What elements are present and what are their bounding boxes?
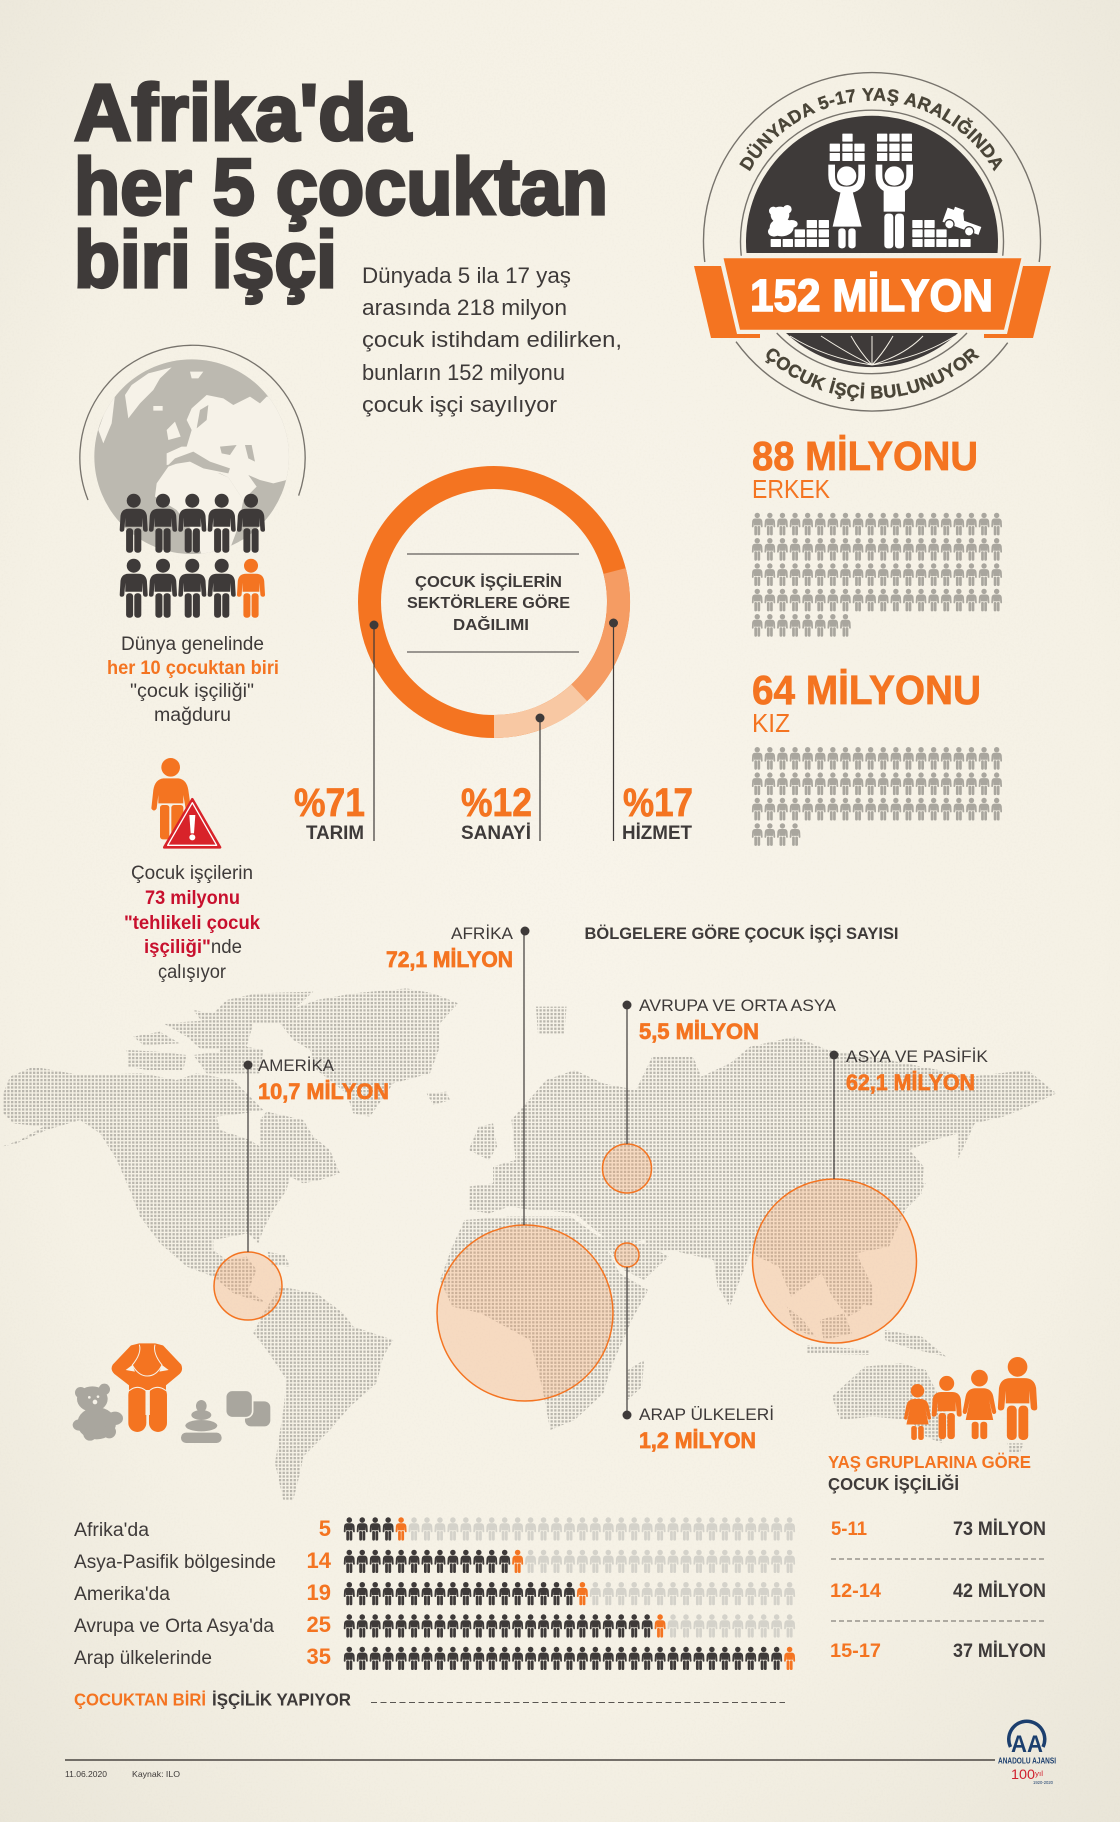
caption: one in ten: mağduru <box>154 705 231 726</box>
leader lines <box>370 618 618 841</box>
footer <box>65 1760 995 1779</box>
row: Afrika: Afrika'da <box>74 1520 149 1541</box>
badge: 152 milyon <box>694 72 1051 412</box>
caption: hazardous child labour: 73 milyonu <box>145 888 240 909</box>
region bubble: Arap ülkeleri: ARAP ÜLKELERİ <box>639 1405 774 1424</box>
table: age groups <box>830 1517 1046 1662</box>
footer: 11.06.2020 <box>65 1769 107 1779</box>
caption: one in ten: her 10 çocuktan biri <box>107 658 279 679</box>
table: age groups: 15-17 <box>830 1640 881 1662</box>
table: age groups: 37 MİLYON <box>953 1639 1046 1662</box>
children carrying blocks <box>768 134 985 248</box>
region bubble: Amerika: 10,7 MİLYON <box>258 1079 389 1104</box>
caption: hazardous child labour: işçiliği"nde <box>144 937 242 958</box>
pictogram: 88 <box>752 513 1002 637</box>
intro paragraph <box>362 263 622 417</box>
pictogram: 64 <box>752 747 1002 846</box>
row: Afrika: 5 <box>319 1516 331 1541</box>
row: Amerika <box>74 1580 795 1605</box>
row: Avrupa ve Orta Asya: 25 <box>307 1612 331 1637</box>
region bubble: Afrika <box>386 924 613 1401</box>
intro paragraph: arasında 218 milyon <box>362 295 567 320</box>
caption: hazardous child labour <box>124 863 260 983</box>
label: sanayi <box>461 781 532 844</box>
badge dark disc <box>746 116 998 367</box>
region bubble: Afrika: 72,1 MİLYON <box>386 947 513 972</box>
logo: Anadolu Ajansı: yıl <box>1035 1771 1044 1778</box>
logo: Anadolu Ajansı <box>998 1721 1056 1785</box>
logo: Anadolu Ajansı: ANADOLU AJANSI <box>998 1756 1056 1766</box>
note: one in N children: ÇOCUKTAN BİRİ <box>74 1690 206 1710</box>
intro paragraph: çocuk işçi sayılıyor <box>362 392 557 417</box>
stat: girls: KIZ <box>752 708 790 738</box>
label: hizmet: HİZMET <box>622 823 692 844</box>
table: age groups: 5-11 <box>831 1518 867 1540</box>
ten children <box>120 494 265 618</box>
crouching child <box>112 1344 181 1432</box>
title: biri işçi <box>74 215 337 304</box>
row: Arap ülkeleri: Arap ülkelerinde <box>74 1648 212 1669</box>
heading: regional counts: BÖLGELERE GÖRE ÇOCUK İŞÇİ SAYISI <box>584 924 898 943</box>
region bubble: Amerika: AMERİKA <box>258 1056 335 1075</box>
logo: Anadolu Ajansı: AA <box>1011 1731 1043 1758</box>
heading: age groups: YAŞ GRUPLARINA GÖRE <box>828 1452 1031 1472</box>
orange banner <box>694 257 1051 338</box>
donut segments <box>370 478 619 726</box>
row: Asya-Pasifik: Asya-Pasifik bölgesinde <box>74 1552 276 1573</box>
footer: Kaynak: ILO <box>132 1769 180 1779</box>
region bubble: Asya ve Pasifik: ASYA VE PASİFİK <box>846 1047 989 1066</box>
caption: hazardous child labour: Çocuk işçilerin <box>131 863 253 884</box>
stat: girls: 64 MİLYONU <box>752 667 981 713</box>
region bubble: Avrupa ve Orta Asya: AVRUPA VE ORTA ASYA <box>639 996 837 1015</box>
intro paragraph: çocuk istihdam edilirken, <box>362 327 622 352</box>
row: Asya-Pasifik: 14 <box>307 1548 332 1573</box>
label: tarım: TARIM <box>306 823 364 844</box>
globe <box>80 345 305 558</box>
globe with people <box>80 345 305 618</box>
icon: child with toys <box>73 1344 270 1443</box>
boy <box>879 165 910 248</box>
table: age groups: 12-14 <box>830 1580 881 1602</box>
caption: hazardous child labour: çalışıyor <box>158 962 227 983</box>
caption: one in ten: "çocuk işçiliği" <box>130 681 254 702</box>
teddy <box>768 205 798 237</box>
curved footer: ÇOCUK İŞÇİ BULUNUYOR <box>765 348 980 402</box>
stat: boys: ERKEK <box>752 474 831 504</box>
row: Amerika: 19 <box>307 1580 331 1605</box>
caption: one in ten <box>107 634 279 726</box>
region bubble: Asya ve Pasifik <box>752 1047 989 1343</box>
table: age groups: 42 MİLYON <box>953 1579 1046 1602</box>
caption: one in ten: Dünya genelinde <box>121 634 264 655</box>
globe meridians <box>790 336 955 365</box>
note: one in N children: İŞÇİLİK YAPIYOR <box>212 1690 351 1710</box>
truck <box>941 204 985 239</box>
row: Arap ülkeleri <box>74 1644 795 1670</box>
icon: family of age groups <box>904 1357 1037 1440</box>
region bubble: Asya ve Pasifik: 62,1 MİLYON <box>846 1070 975 1095</box>
stat: boys: 88 MİLYONU <box>752 433 978 479</box>
teddy bear <box>73 1384 123 1441</box>
logo: Anadolu Ajansı: 100 <box>1011 1766 1035 1782</box>
region bubble: Avrupa ve Orta Asya: 5,5 MİLYON <box>639 1019 759 1044</box>
donut centre label <box>407 554 579 652</box>
intro paragraph: Dünyada 5 ila 17 yaş <box>362 263 571 288</box>
region bubble: Avrupa ve Orta Asya <box>602 996 837 1193</box>
table: age groups: 73 MİLYON <box>953 1517 1046 1540</box>
table: child labour rate by region <box>74 1516 795 1670</box>
intro paragraph: bunların 152 milyonu <box>362 360 565 385</box>
region bubble: Afrika: AFRİKA <box>451 924 514 943</box>
icon: child with warning sign <box>151 758 220 847</box>
donut centre label: DAĞILIMI <box>453 615 529 634</box>
caption: hazardous child labour: "tehlikeli çocuk <box>124 913 260 934</box>
label: tarım: %71 <box>294 781 365 825</box>
note: one in N children <box>74 1690 785 1710</box>
region bubble: Amerika <box>214 1056 389 1320</box>
row: Avrupa ve Orta Asya: Avrupa ve Orta Asya'da <box>74 1616 274 1637</box>
row: Avrupa ve Orta Asya <box>74 1612 795 1638</box>
region bubble: Arap ülkeleri <box>615 1243 774 1453</box>
logo: Anadolu Ajansı: 1920-2020 <box>1033 1780 1053 1785</box>
label: sanayi: %12 <box>461 781 532 825</box>
row: Afrika <box>74 1516 795 1541</box>
title <box>74 68 608 304</box>
stat: boys <box>752 433 1002 637</box>
title: her 5 çocuktan <box>74 142 608 231</box>
label: hizmet <box>622 781 693 844</box>
badge rings <box>703 73 1040 411</box>
stacking toy <box>181 1400 222 1443</box>
orange banner: 152 MİLYON <box>750 270 993 321</box>
donut centre label: SEKTÖRLERE GÖRE <box>407 593 570 612</box>
donut centre label: ÇOCUK İŞÇİLERİN <box>415 573 562 591</box>
label: tarım <box>294 781 365 844</box>
row: Asya-Pasifik <box>74 1548 795 1573</box>
row: Arap ülkeleri: 35 <box>307 1644 331 1669</box>
label: sanayi: SANAYİ <box>461 823 531 844</box>
donut chart: sectors <box>294 478 693 844</box>
curved heading: DÜNYADA 5-17 YAŞ ARALIĞINDA <box>739 88 1002 172</box>
stat: girls <box>752 667 1002 846</box>
title: Afrika'da <box>74 68 412 157</box>
row: Amerika: Amerika'da <box>74 1584 170 1605</box>
heading: age groups: ÇOCUK İŞÇİLİĞİ <box>828 1473 959 1494</box>
girl <box>832 165 862 248</box>
dotted world map <box>0 980 1120 1510</box>
heading: age groups <box>828 1452 1031 1494</box>
toy blocks <box>226 1390 270 1426</box>
region bubble: Arap ülkeleri: 1,2 MİLYON <box>639 1428 756 1453</box>
label: hizmet: %17 <box>623 781 693 825</box>
